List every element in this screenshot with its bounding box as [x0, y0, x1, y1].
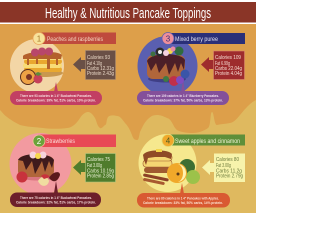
- nutrition box: [214, 154, 245, 182]
- callout: There are 75 calories in 1 4" Buckwheat Pancakes.: [20, 196, 92, 200]
- heading pill: Strawberries: [46, 139, 75, 145]
- nutrition box: Fat 4.10g: [87, 61, 102, 67]
- nutrition box: Fat 3.00g: [87, 163, 102, 169]
- nutrition box: Carbs 22.04g: [215, 66, 242, 72]
- heading pill: Sweet apples and cinnamon: [175, 139, 240, 145]
- nutrition box: Carbs 12.31g: [87, 66, 114, 72]
- heading pill: [33, 134, 116, 147]
- nutrition box: Fat 6.99g: [215, 61, 230, 67]
- heading pill: [33, 32, 116, 44]
- panel: peaches and raspberries: [10, 32, 116, 105]
- nutrition box: Carbs 10.19g: [87, 168, 114, 174]
- panel: mixed berry puree: [137, 32, 245, 105]
- panel: strawberries: [10, 133, 116, 207]
- callout: [137, 193, 230, 208]
- arrow: [73, 160, 86, 175]
- nutrition box: Calories 109: [215, 55, 241, 61]
- topping circle: [10, 39, 64, 93]
- nutrition box: [86, 154, 116, 182]
- panel: sweet apples and cinnamon: [137, 134, 245, 208]
- callout pointer: [54, 181, 58, 193]
- arrow: [201, 57, 214, 72]
- topping circle: [138, 36, 198, 96]
- heading pill: 4: [166, 136, 171, 146]
- nutrition box: Calories 80: [216, 157, 239, 163]
- arrow: [73, 57, 86, 72]
- nutrition box: Protein 2.79g: [216, 174, 243, 180]
- callout pointer: [181, 80, 185, 92]
- callout: [10, 91, 102, 105]
- callout: [10, 192, 101, 207]
- topping circle: [10, 133, 72, 195]
- nutrition box: Calories 93: [87, 55, 110, 61]
- background: [0, 0, 256, 213]
- callout: There are 109 calories in 1 4" Blueberry Pancakes.: [147, 94, 219, 98]
- heading pill: 3: [166, 34, 171, 44]
- nutrition box: Protein 4.04g: [215, 71, 242, 77]
- pancake stack illustration: [20, 48, 63, 85]
- title banner: [0, 0, 256, 24]
- callout: Calorie breakdown: 37% fat, 50% carbs, 13% protein.: [143, 98, 223, 102]
- heading pill: 2: [37, 137, 42, 146]
- callout pointer: [180, 183, 184, 194]
- callout pointer: [54, 82, 58, 92]
- nutrition box: [214, 51, 244, 80]
- nutrition box: Protein 2.85g: [87, 174, 114, 180]
- heading pill: 1: [37, 34, 42, 44]
- callout: There are 80 calories in 1 4" Pancakes with Apples.: [147, 196, 219, 200]
- pancake stack illustration: [16, 152, 60, 186]
- arrow: [202, 160, 215, 175]
- heading pill: [162, 134, 245, 146]
- nutrition box: Protein 2.43g: [87, 71, 114, 77]
- nutrition box: Carbs 11.2g: [216, 168, 242, 174]
- heading pill: Peaches and raspberries: [47, 37, 103, 43]
- callout: Calorie breakdown: 32% fat, 51% carbs, 17% protein.: [16, 200, 96, 204]
- callout: There are 93 calories in 1 4" Buckwheat Pancakes.: [20, 94, 92, 98]
- nutrition box: Fat 3.00g: [216, 163, 231, 169]
- nutrition box: Calories 75: [87, 157, 110, 163]
- heading pill: Mixed berry puree: [175, 37, 219, 43]
- callout: [137, 91, 229, 105]
- callout: Calorie breakdown: 39% fat, 51% carbs, 10% protein.: [16, 98, 96, 102]
- nutrition box: [86, 50, 116, 80]
- heading pill: [162, 32, 245, 44]
- pancake stack illustration: [143, 149, 200, 185]
- callout: Calorie breakdown: 33% fat, 56% carbs, 14% protein.: [143, 201, 223, 205]
- topping circle: [138, 134, 196, 192]
- pancake stack illustration: [147, 46, 190, 86]
